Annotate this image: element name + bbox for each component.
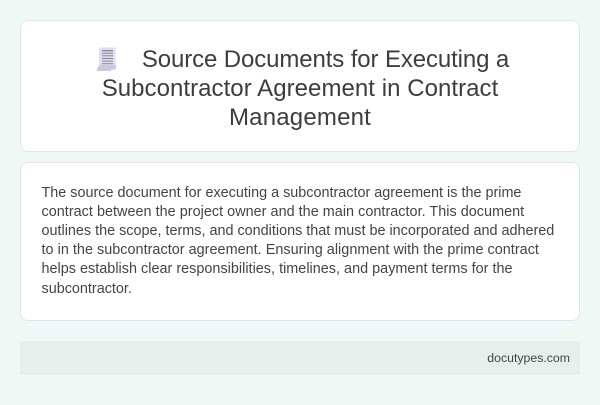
text block: description — [42, 185, 554, 297]
panel: description card — [20, 162, 580, 321]
text block: description: subcontractor. — [42, 281, 132, 297]
icon: document — [96, 47, 116, 71]
title: Management — [229, 104, 371, 131]
text block: description: to in the subcontractor agreement. Ensuring alignment with the prime contract — [42, 242, 539, 258]
title: Source Documents for Executing a — [142, 46, 509, 73]
footer text: site name: docutypes.com — [487, 351, 570, 365]
text block: description: The source document for executing a subcontractor agreement is the prime — [42, 185, 521, 201]
text block: description: helps establish clear responsibilities, timelines, and payment terms for the — [42, 261, 513, 277]
text block: description: contract between the project owner and the main contractor. This document — [42, 204, 524, 220]
title — [102, 46, 510, 131]
text block: description: outlines the scope, terms, and conditions that must be incorporated and adhered — [42, 223, 554, 239]
title: Subcontractor Agreement in Contract — [102, 75, 498, 102]
panel: title card — [20, 20, 580, 152]
footer bar — [20, 341, 580, 375]
